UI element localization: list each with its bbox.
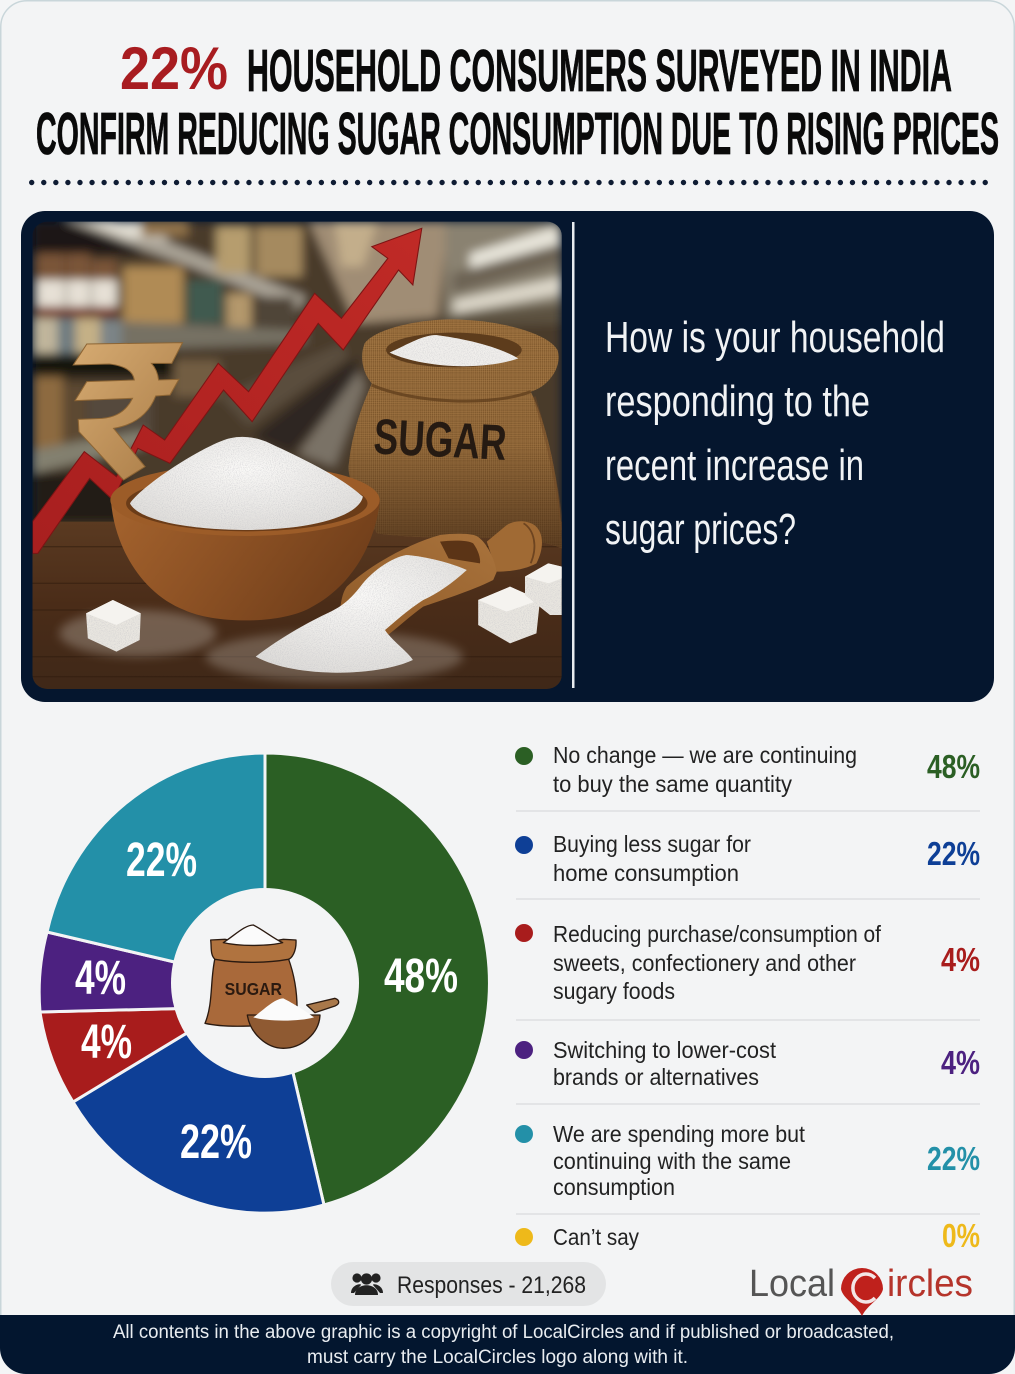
icon: sugar sack and bowl: SUGAR xyxy=(225,979,282,999)
panel: question banner xyxy=(21,211,994,702)
legend item: buying less xyxy=(515,831,980,886)
table xyxy=(32,522,562,689)
segment: no change 48% xyxy=(265,753,489,1205)
pie percentage labels: 22% xyxy=(126,834,197,887)
icon: sugar sack and bowl xyxy=(205,925,339,1048)
pie percentage labels: 22% xyxy=(180,1116,252,1169)
pie percentage labels: 48% xyxy=(384,950,458,1003)
legend item: no change: to buy the same quantity xyxy=(553,771,792,797)
legend item: switching: Switching to lower-cost xyxy=(553,1037,777,1063)
survey question: sugar prices? xyxy=(605,505,796,554)
rupee symbol xyxy=(73,343,182,480)
legend item: reducing sweets xyxy=(515,921,980,1004)
survey question xyxy=(605,313,945,554)
pie percentage labels xyxy=(75,834,458,1169)
lower row xyxy=(34,377,63,450)
legend xyxy=(515,742,980,1254)
rising red arrow xyxy=(32,228,422,553)
legend item: can't say xyxy=(515,1217,980,1254)
footer bar xyxy=(0,1315,1015,1374)
donut hole xyxy=(171,888,359,1078)
title xyxy=(36,35,999,167)
legend item: buying less: 22% xyxy=(927,835,980,872)
pie percentage labels: 4% xyxy=(81,1016,132,1069)
icon: people xyxy=(351,1273,383,1295)
legend item: spending more: continuing with the same xyxy=(553,1148,791,1174)
photo: sugar and rising price arrow xyxy=(32,220,562,689)
sugar in scoop and spill xyxy=(256,555,467,673)
sugar cubes xyxy=(86,563,562,652)
legend item: no change: No change — we are continuing xyxy=(553,742,857,768)
legend item: spending more: consumption xyxy=(553,1174,675,1200)
right shelves xyxy=(445,222,562,320)
segment: reducing sweets 4% xyxy=(40,1008,200,1102)
segment: spending more 22% xyxy=(47,753,265,980)
icon: map pin C xyxy=(841,1268,883,1316)
legend item: no change xyxy=(515,742,980,797)
legend item: switching: 4% xyxy=(941,1044,980,1081)
legend item: spending more: We are spending more but xyxy=(553,1121,806,1147)
legend item: reducing sweets: 4% xyxy=(941,941,980,978)
footer bar: All contents in the above graphic is a copyright of LocalCircles and if published or broadcasted, xyxy=(113,1322,894,1343)
legend item: switching xyxy=(515,1037,980,1090)
legend item: spending more: 22% xyxy=(927,1140,980,1177)
banner background xyxy=(21,211,994,702)
LocalCircles logo xyxy=(749,1263,973,1316)
segment: switching brands 4% xyxy=(39,932,200,1012)
sack label: SUGAR xyxy=(372,408,508,471)
legend item: reducing sweets: sugary foods xyxy=(553,978,675,1004)
LocalCircles logo: ircles xyxy=(887,1263,973,1305)
title highlight: 22%: 22% xyxy=(120,35,228,102)
second shelf edge xyxy=(32,318,57,353)
scoop with sugar xyxy=(256,521,542,673)
vertical divider xyxy=(572,222,574,688)
spilled sugar xyxy=(59,610,216,657)
legend item: switching: brands or alternatives xyxy=(553,1064,759,1090)
legend item: buying less: home consumption xyxy=(553,860,739,886)
LocalCircles logo: Local xyxy=(749,1263,835,1305)
footer bar: must carry the LocalCircles logo along with it. xyxy=(307,1347,688,1368)
legend item: can't say: Can’t say xyxy=(553,1224,639,1250)
bottles row xyxy=(37,253,65,280)
donut chart xyxy=(39,753,489,1213)
sugar mound xyxy=(130,437,363,530)
pie percentage labels: 4% xyxy=(75,952,126,1005)
legend item: can't say: 0% xyxy=(942,1217,980,1254)
far aisle xyxy=(309,222,449,323)
segment: buying less 22% xyxy=(73,1025,324,1213)
legend item: buying less: Buying less sugar for xyxy=(553,831,751,857)
legend item: reducing sweets: Reducing purchase/consumption of xyxy=(553,921,882,947)
survey question: responding to the xyxy=(605,377,870,426)
sugar sack xyxy=(349,319,562,548)
responses pill: Responses - 21,268 xyxy=(397,1272,586,1299)
legend item: reducing sweets: sweets, confectionery and other xyxy=(553,950,856,976)
wooden bowl xyxy=(110,437,380,620)
top shelf edge xyxy=(63,220,306,310)
legend item: spending more xyxy=(515,1121,980,1200)
responses pill xyxy=(331,1262,606,1306)
legend item: no change: 48% xyxy=(927,748,980,785)
survey question: recent increase in xyxy=(605,441,864,490)
